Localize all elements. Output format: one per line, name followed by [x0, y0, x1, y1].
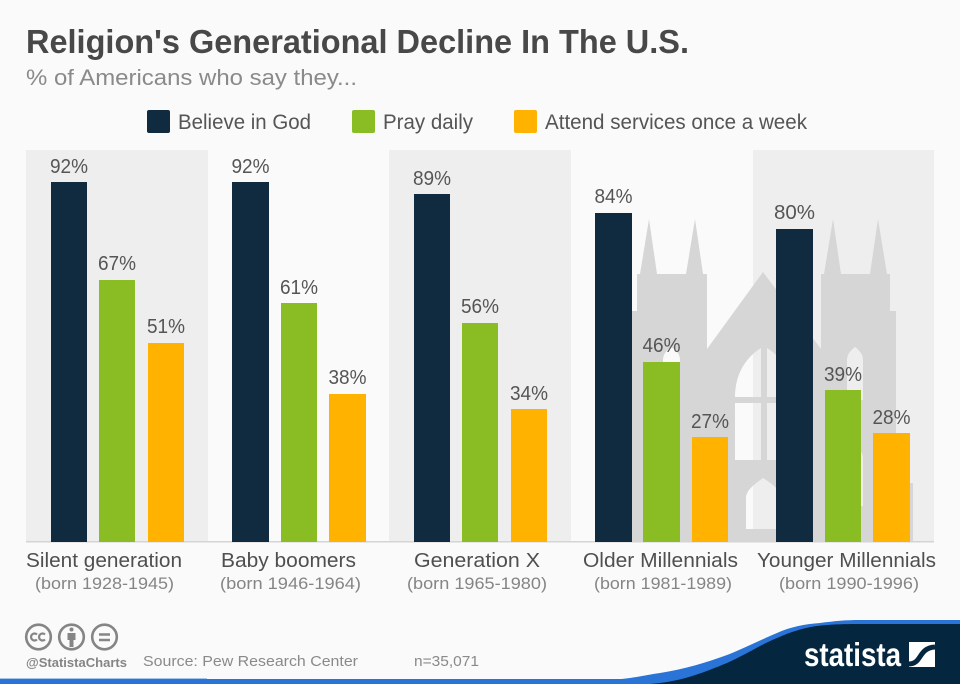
legend: Believe in God	[178, 111, 311, 134]
legend: Pray daily	[383, 111, 473, 134]
group: Silent generation	[26, 156, 185, 593]
group: Silent generation: 92%	[50, 156, 88, 178]
group: Generation X: 34%	[510, 383, 548, 405]
group: Older Millennials: Older Millennials	[583, 550, 738, 572]
group: Baby boomers: (born 1946-1964)	[220, 574, 361, 593]
footer band	[0, 620, 960, 684]
group: Silent generation: Silent generation	[26, 550, 182, 572]
group: Baby boomers	[220, 156, 367, 593]
group: Generation X: (born 1965-1980)	[407, 574, 547, 593]
panel backgrounds	[26, 150, 934, 542]
group: Older Millennials	[583, 186, 738, 593]
group: Generation X: 89%	[413, 168, 451, 190]
group: Baby boomers: 61%	[280, 277, 318, 299]
group: Older Millennials: 46%	[642, 335, 681, 357]
source: Source: Pew Research Center	[143, 653, 358, 670]
group: Silent generation: 67%	[98, 253, 136, 275]
group: Older Millennials: 84%	[594, 186, 633, 208]
group: Younger Millennials: (born 1990-1996)	[779, 574, 919, 593]
sample size: n=35,071	[414, 653, 479, 670]
statista logo: statista	[804, 636, 902, 673]
group: Silent generation: 51%	[147, 316, 185, 338]
subtitle: % of Americans who say they...	[26, 65, 357, 90]
church silhouette	[632, 219, 913, 541]
group: Silent generation: (born 1928-1945)	[35, 574, 174, 593]
group: Older Millennials: 27%	[691, 411, 729, 433]
group: Younger Millennials: 80%	[774, 202, 815, 224]
handle: @StatistaCharts	[26, 656, 127, 670]
group: Younger Millennials: 39%	[824, 364, 862, 386]
group: Generation X	[407, 168, 548, 593]
legend: Attend services once a week	[545, 111, 807, 134]
group: Generation X: Generation X	[414, 550, 540, 572]
group: Younger Millennials: 28%	[872, 407, 911, 429]
axis line	[26, 541, 934, 542]
group: Younger Millennials	[757, 202, 936, 593]
icons: creative commons licence	[26, 625, 117, 649]
group: Older Millennials: (born 1981-1989)	[594, 574, 732, 593]
group: Younger Millennials: Younger Millennials	[757, 550, 936, 572]
title: Religion's Generational Decline In The U.S.	[26, 23, 689, 60]
group: Baby boomers: 38%	[328, 367, 367, 389]
legend	[147, 110, 807, 134]
group: Baby boomers: 92%	[232, 156, 270, 178]
group: Generation X: 56%	[461, 296, 499, 318]
group: Baby boomers: Baby boomers	[221, 550, 356, 572]
